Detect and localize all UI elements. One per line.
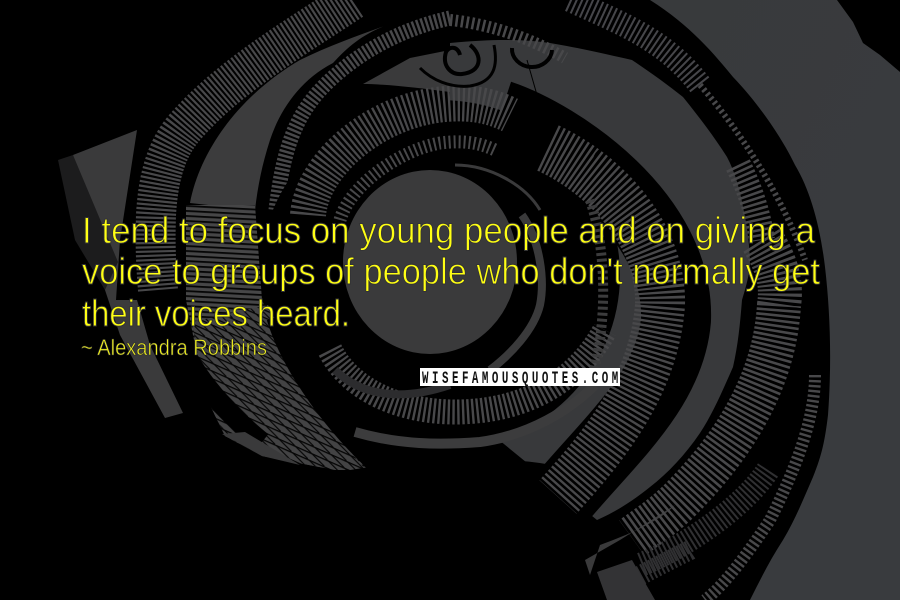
inner disc of sky [343,170,517,354]
quote text [82,210,821,334]
quote text: their voices heard. [82,293,350,334]
watermark: WISEFAMOUSQUOTES.COM [422,370,618,389]
author attribution: ~ Alexandra Robbins [81,335,267,360]
quote text: I tend to focus on young people and on giving a [82,210,815,251]
decorative ironwork scrolls [420,45,630,172]
quote text: voice to groups of people who don't normally get [82,251,821,292]
top right tree silhouette [837,0,900,72]
